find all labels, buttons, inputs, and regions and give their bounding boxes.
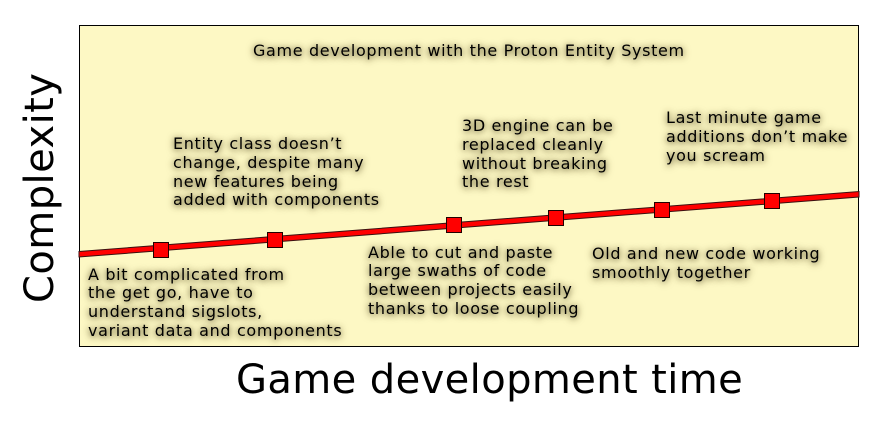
panel: chart background — [79, 25, 859, 347]
note: old and new code: Old and new code working smoothly together — [592, 244, 820, 282]
title: Game development with the Proton Entity System — [253, 41, 685, 60]
note: 3D engine: 3D engine can be replaced cleanly without breaking the rest — [462, 116, 613, 191]
x axis label: Game development time — [236, 357, 743, 403]
note: complicated start: A bit complicated from the get go, have to understand sigslots, variant data and components — [88, 264, 342, 340]
milestone markers — [154, 194, 780, 258]
note: last minute additions: Last minute game additions don’t make you scream — [666, 108, 848, 165]
y axis label: Complexity — [17, 73, 63, 303]
note: cut and paste: Able to cut and paste large swaths of code between projects easily thanks to loose coupling — [368, 242, 579, 318]
trend line — [79, 192, 859, 257]
note: entity class: Entity class doesn’t change, despite many new features being added with components — [173, 134, 380, 209]
